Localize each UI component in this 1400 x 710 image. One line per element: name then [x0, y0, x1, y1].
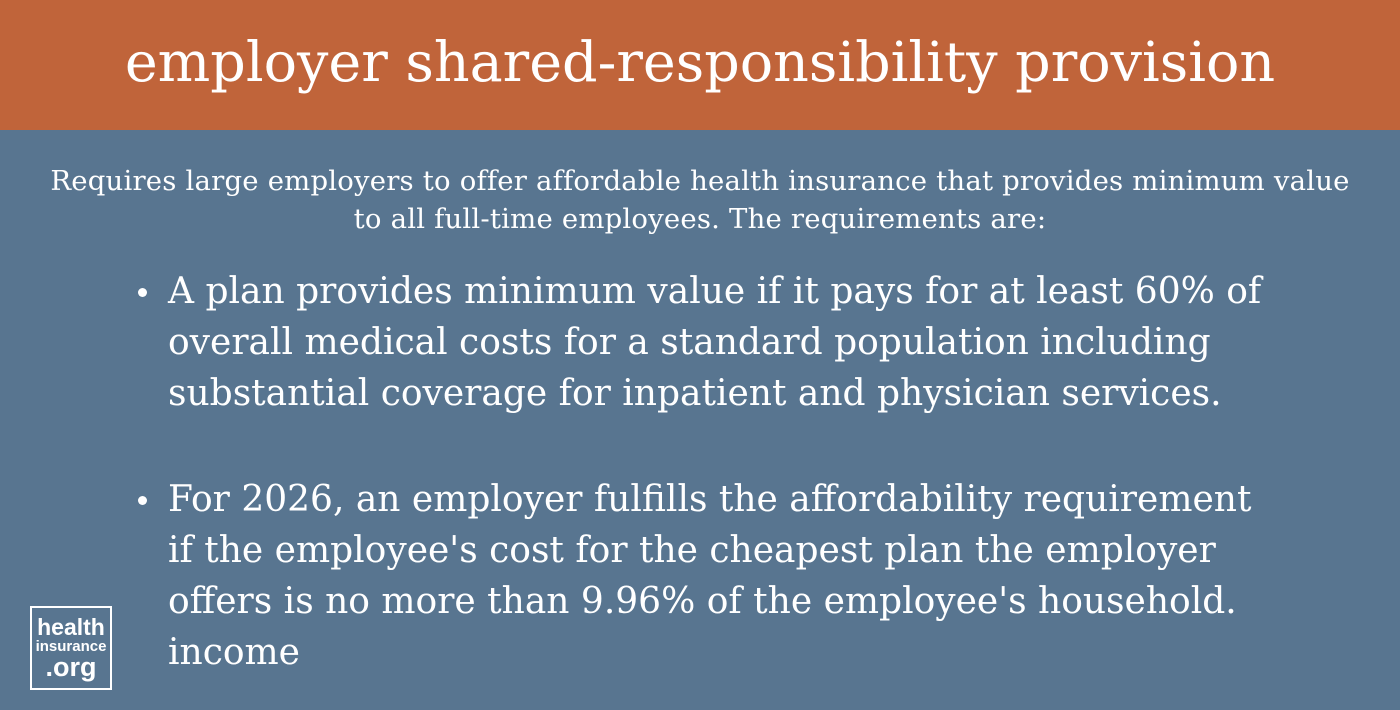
- bullet: affordability: [168, 474, 1251, 678]
- bullet: affordability: income: [168, 632, 300, 673]
- logo: health: [37, 614, 105, 640]
- bullet: minimum value: [168, 266, 1261, 419]
- logo: insurance: [36, 638, 106, 655]
- intro text: [50, 165, 1350, 235]
- bullet: affordability: if the employee's cost for the cheapest plan the employer: [168, 530, 1216, 571]
- title: employer shared-responsibility provision: [125, 30, 1275, 95]
- bullet: minimum value: overall medical costs for a standard population including: [168, 322, 1211, 363]
- header bar: [0, 0, 1400, 130]
- bullet: minimum value: A plan provides minimum value if it pays for at least 60% of: [168, 271, 1261, 312]
- intro text: to all full-time employees. The requirements are:: [354, 203, 1046, 235]
- logo: .org: [46, 652, 96, 682]
- bullet: minimum value: substantial coverage for inpatient and physician services.: [168, 373, 1222, 414]
- logo: [30, 606, 112, 690]
- bullet: affordability: offers is no more than 9.96% of the employee's household.: [168, 581, 1237, 622]
- bullet: affordability: For 2026, an employer fulfills the affordability requirement: [168, 479, 1251, 520]
- intro text: Requires large employers to offer affordable health insurance that provides minimum value: [50, 165, 1350, 197]
